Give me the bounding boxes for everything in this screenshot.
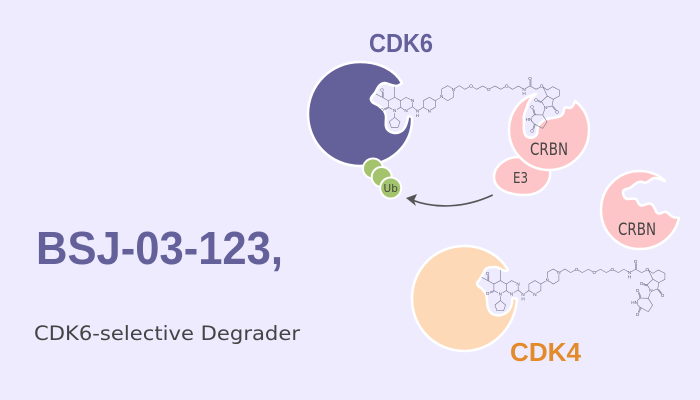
molecule: unbound degrader: N xyxy=(510,292,513,296)
molecule: unbound degrader: N xyxy=(521,292,525,297)
molecule: bound degrader: O xyxy=(530,128,534,134)
molecule: bound degrader: N xyxy=(452,87,455,92)
CRBN free label: CRBN xyxy=(618,220,656,239)
molecule: bound degrader: O xyxy=(540,84,544,88)
ubiquitin chain: Ub xyxy=(384,183,398,195)
molecule: unbound degrader: O xyxy=(611,267,615,272)
molecule: unbound degrader: O xyxy=(593,270,597,275)
molecule: bound degrader: N xyxy=(440,94,443,99)
molecule: bound degrader: N xyxy=(522,87,526,92)
heading: CDK4: CDK4 xyxy=(510,339,582,367)
molecule: unbound degrader: HN xyxy=(631,300,638,305)
molecule: bound degrader xyxy=(376,76,559,134)
molecule: bound degrader: H xyxy=(522,91,526,96)
CDK6 protein xyxy=(308,62,412,166)
molecule: bound degrader: N xyxy=(544,105,547,110)
molecule: bound degrader: O xyxy=(469,84,473,88)
molecule: unbound degrader: O xyxy=(575,267,579,272)
arrow: ubiquitin transfer xyxy=(406,194,493,206)
molecule: unbound degrader: O xyxy=(634,259,638,264)
molecule: bound degrader: N xyxy=(393,108,396,113)
CRBN bound label: CRBN xyxy=(530,140,568,159)
molecule: unbound degrader: H xyxy=(628,274,631,279)
molecule: bound degrader: O xyxy=(380,88,384,92)
CRBN bound xyxy=(509,94,589,170)
molecule: unbound degrader: O xyxy=(661,293,665,298)
molecule: bound degrader: O xyxy=(505,84,509,88)
molecule: unbound degrader: O xyxy=(640,281,644,286)
molecule: bound degrader: N xyxy=(416,108,419,114)
molecule: bound degrader: H xyxy=(416,113,419,118)
molecule: unbound degrader: N xyxy=(628,270,631,275)
molecule: unbound degrader: N xyxy=(499,292,502,296)
molecule: bound degrader: HN xyxy=(526,117,532,122)
molecule: unbound degrader: N xyxy=(533,292,537,297)
CDK4 protein xyxy=(412,246,517,351)
molecule: unbound degrader: N xyxy=(557,270,561,275)
molecule: unbound degrader: N xyxy=(546,278,549,282)
molecule: unbound degrader: O xyxy=(486,271,490,276)
molecule: bound degrader: N xyxy=(411,98,414,103)
title: BSJ-03-123, xyxy=(36,222,283,274)
molecule: bound degrader: O xyxy=(530,104,534,110)
molecule: unbound degrader: O xyxy=(636,312,640,317)
E3 label: E3 xyxy=(513,169,528,187)
molecule: unbound degrader: N xyxy=(649,288,653,293)
subtitle: CDK6-selective Degrader xyxy=(34,322,301,345)
molecule: unbound degrader xyxy=(482,259,665,317)
molecule: unbound degrader: O xyxy=(636,288,640,293)
E3 ligase xyxy=(494,157,550,195)
molecule: bound degrader: O xyxy=(380,108,384,112)
ubiquitin chain xyxy=(363,158,401,198)
molecule: unbound degrader: N xyxy=(516,281,520,286)
heading: CDK6: CDK6 xyxy=(369,30,433,58)
molecule: bound degrader: O xyxy=(487,87,491,92)
CRBN free xyxy=(601,171,679,249)
molecule: bound degrader: O xyxy=(534,98,538,102)
molecule: unbound degrader: H xyxy=(521,296,525,301)
molecule: unbound degrader: O xyxy=(486,291,490,296)
molecule: bound degrader: O xyxy=(555,110,559,114)
molecule: bound degrader: N xyxy=(404,108,408,113)
molecule: bound degrader: O xyxy=(528,76,532,81)
molecule: bound degrader: N xyxy=(428,108,431,114)
molecule: unbound degrader: O xyxy=(646,267,650,272)
